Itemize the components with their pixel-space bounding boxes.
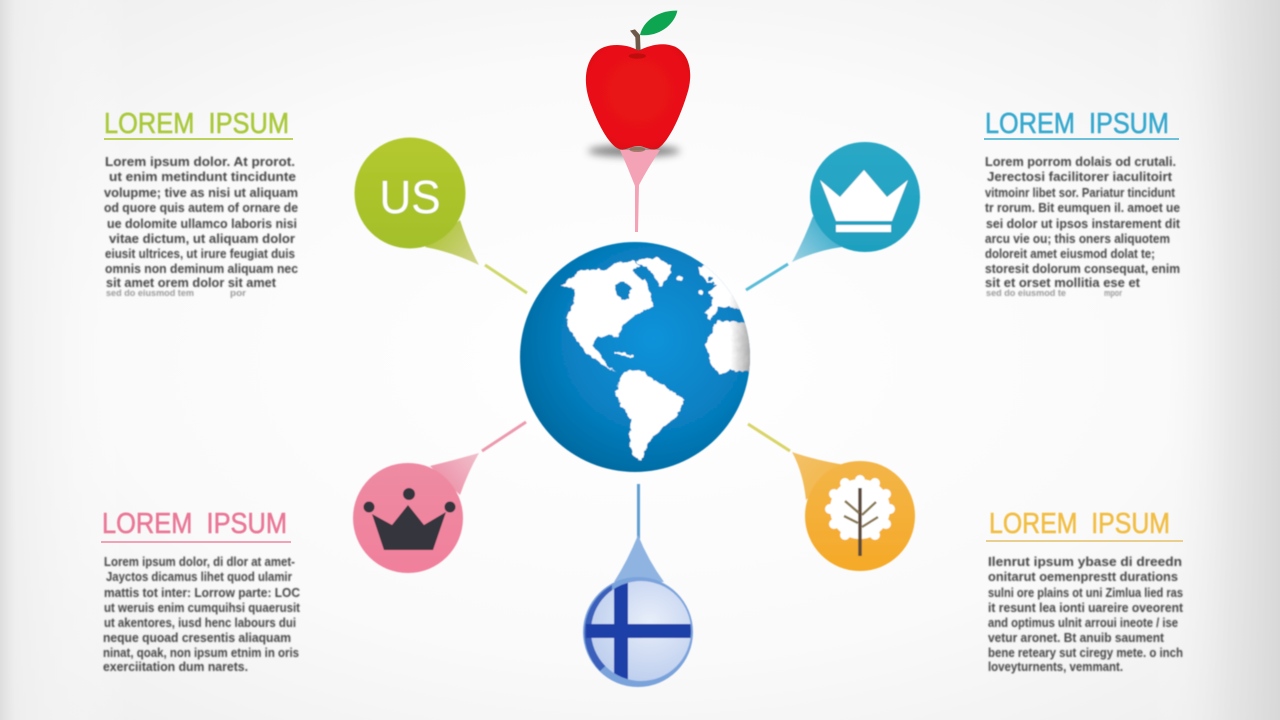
pointer	[792, 452, 845, 500]
body text: top-right: vitmoinr libet sor. Pariatur tincidunt	[985, 186, 1176, 200]
connector line	[485, 265, 527, 293]
body text: top-right: tr rorum. Bit eumquen il. amoet ue	[985, 201, 1180, 215]
body text: top-left: omnis non deminum aliquam nec	[105, 262, 298, 276]
connector line	[482, 422, 526, 451]
panel: bottom-right text block	[986, 508, 1184, 674]
body text: bottom-left: ut weruis enim cumquihsi quaerusit	[104, 601, 301, 615]
body text: bottom-right: vetur aronet. Bt anuib saument	[988, 631, 1165, 645]
apple stem hollow	[629, 53, 646, 59]
divider: top-right	[984, 138, 1179, 140]
body text: bottom-left: neque quoad cresentis aliaquam	[103, 631, 291, 645]
divider: bottom-right	[986, 540, 1183, 542]
pin: flag blue	[583, 484, 693, 687]
label: US: US	[380, 171, 440, 223]
body text: bottom-right: and optimus ulnit arroui ineote / ise	[988, 616, 1178, 630]
icon: apple	[586, 11, 690, 152]
body text: bottom-left: exerciitation dum narets.	[103, 660, 248, 674]
body text: top-right: doloreit amet eiusmod dolat te;	[985, 247, 1155, 261]
connector line	[746, 264, 788, 290]
flag horizontal bar left end	[586, 624, 594, 638]
icon: white crown	[820, 170, 908, 232]
body text: top-left: od quore quis autem of ornare de	[104, 201, 298, 215]
pin: US green	[354, 138, 527, 293]
body text: top-left: vitae dictum, ut aliquam dolor	[109, 232, 295, 246]
pointer	[792, 216, 842, 262]
body text: bottom-right: it resunt lea ionti uareire oveorent	[988, 601, 1184, 615]
globe continents	[561, 258, 752, 461]
body text: top-right: Jerectosi facilitorer iaculitoirt	[987, 170, 1173, 184]
body text: top-left: eiusit ultrices, ut irure feugiat duis	[105, 247, 295, 261]
connector line	[637, 484, 640, 539]
pin: crown pink	[353, 422, 526, 573]
circle left rim	[584, 585, 612, 671]
heading: bottom-left: LOREM IPSUM	[102, 508, 287, 540]
pin: crown teal	[746, 142, 920, 290]
body text: top-left: ut enim metindunt tincidunte	[109, 170, 296, 184]
body text: bottom-right: bene reteary sut ciregy mete. o inch	[988, 646, 1183, 660]
globe	[520, 242, 752, 472]
icon: dark crown	[364, 488, 456, 550]
connector line	[748, 424, 790, 451]
apple leaf	[640, 11, 677, 35]
body text: bottom-right	[988, 555, 1184, 674]
apple stem	[630, 29, 641, 53]
body text: bottom-left: Jayctos dicamus lihet quod ulamir	[106, 570, 292, 584]
body text: top-right: Lorem porrom dolais od crutali.	[985, 155, 1176, 169]
body text: top-right: mpor	[1104, 288, 1122, 298]
circle	[810, 142, 920, 252]
body text: top-left: sed do eiusmod tem	[106, 288, 194, 298]
body text: bottom-left: mattis tot inter: Lorrow parte: LOC	[104, 586, 300, 600]
heading: bottom-right: LOREM IPSUM	[989, 508, 1170, 540]
apple shadow	[588, 145, 680, 157]
pointer	[425, 220, 479, 265]
heading: top-left: LOREM IPSUM	[104, 108, 289, 140]
icon: Finnish flag	[585, 580, 693, 684]
pin: tree orange	[748, 424, 915, 571]
circle	[353, 463, 463, 573]
pointer	[430, 453, 479, 495]
circle	[354, 138, 466, 248]
body text: bottom-left: ut akentores, iusd henc labours dui	[104, 616, 296, 630]
circle	[583, 577, 693, 687]
body text: top-left: por	[230, 288, 247, 298]
globe ocean	[520, 242, 750, 472]
apple base dimple	[629, 147, 645, 152]
body text: bottom-left	[103, 555, 301, 674]
body text: top-right: arcu vie ou; this oners aliquotem	[985, 232, 1170, 246]
body text: top-left: ue dolomite ullamco laboris nisi	[107, 217, 297, 231]
panel: top-right text block	[984, 108, 1181, 298]
body text: top-left	[104, 155, 298, 298]
body text: bottom-right: Ilenrut ipsum ybase di dreedn	[988, 555, 1182, 569]
body text: bottom-right: onitarut oemenprestt durations	[988, 570, 1178, 584]
icon: tree	[825, 475, 895, 556]
body text: bottom-left: Lorem ipsum dolor, di dlor at amet-	[104, 555, 295, 569]
body text: bottom-left: ninat, qoak, non ipsum etnim in oris	[103, 646, 299, 660]
apple body	[586, 44, 690, 150]
heading: top-right: LOREM IPSUM	[985, 108, 1169, 140]
body text: top-left: volupme; tive as nisi ut aliquam	[104, 186, 298, 200]
body text: top-right: storesit dolorum consequat, enim	[985, 262, 1180, 276]
body text: top-right: sit et orset mollitia ese et	[985, 276, 1141, 290]
tree trunk and branches	[858, 488, 862, 556]
pointer: pink	[620, 150, 660, 232]
body text: top-right	[985, 155, 1181, 298]
pin: apple top	[586, 11, 690, 232]
divider: top-left	[104, 138, 293, 140]
panel: top-left text block	[104, 108, 298, 298]
circle	[805, 461, 915, 571]
body text: top-right: sed do eiusmod te	[986, 288, 1066, 298]
panel: bottom-left text block	[101, 508, 301, 674]
body text: bottom-right: sulni ore plains ot uni Zimlua lied ras	[988, 586, 1183, 600]
body text: top-right: sei dolor ut ipsos instarement dit	[986, 217, 1181, 231]
tree crown	[825, 475, 895, 540]
pointer	[614, 535, 664, 582]
body text: bottom-right: loveyturnents, vemmant.	[988, 660, 1123, 674]
body text: top-left: Lorem ipsum dolor. At prorot.	[105, 155, 295, 169]
divider: bottom-left	[101, 541, 291, 543]
body text: top-left: sit amet orem dolor sit amet	[106, 276, 277, 290]
